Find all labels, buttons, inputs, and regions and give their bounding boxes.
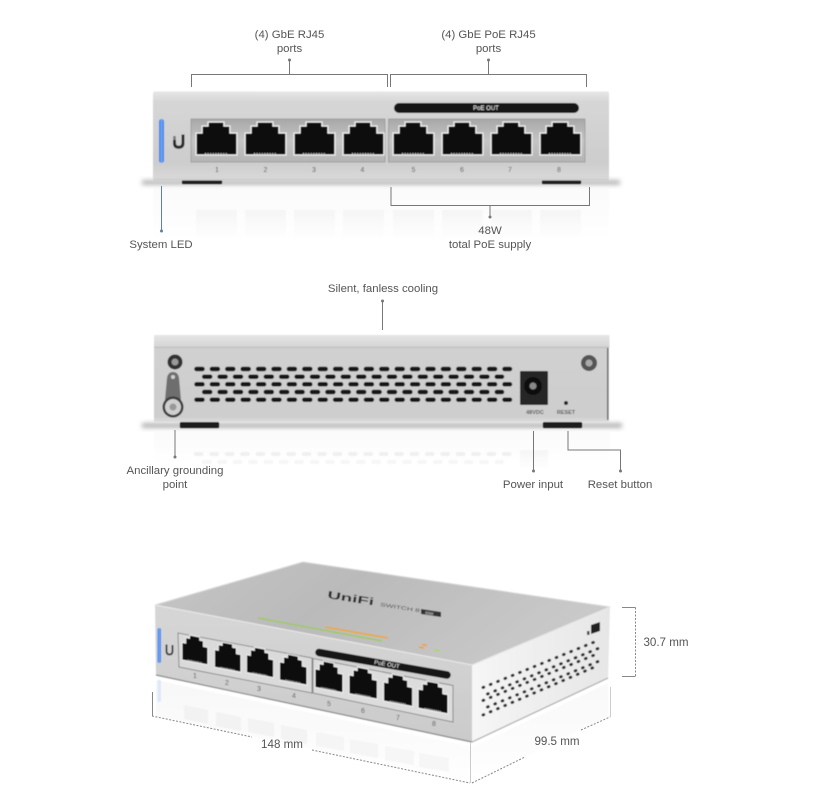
port numbers [215,167,561,174]
right bottom edge [472,678,608,742]
callout: Power input [503,431,564,491]
device: perspective view of switch [155,562,610,783]
port numbers: 4 [361,167,365,174]
port numbers: 8 [557,167,561,174]
system LED [159,119,164,163]
callout: System LED: System LED [129,239,193,251]
callout: System LED [129,186,193,251]
icon: U logo [166,644,172,654]
port numbers: 1 [215,167,219,174]
callout: Reset button [568,431,652,491]
PoE OUT bar: PoE OUT [374,660,400,670]
back plate [154,346,609,422]
port panel 5-8 [388,119,585,162]
reflection below back view [154,432,610,470]
dimension: 30.7 mm height [622,608,689,676]
callout: Ancillary grounding point: point [163,479,188,491]
port numbers [193,673,436,728]
callout: Silent, fanless cooling: Silent, fanless cooling [328,283,438,295]
reflection below front view [153,188,609,246]
callout: Ancillary grounding point [127,430,223,491]
callout: 48W total PoE supply: 48W [478,225,502,237]
ports 1 to 8 [182,634,448,714]
port numbers: 5 [412,167,416,174]
port panel 5-8 [313,658,453,722]
UniFi logo label on top: 60W [425,610,434,616]
right side vents [483,640,598,715]
callout: Ancillary grounding point: Ancillary grounding [127,465,223,477]
screw top right [581,355,597,371]
rubber feet back [180,422,582,428]
callout: GbE RJ45 ports: ports [277,43,302,55]
callout: 48W total PoE supply [391,187,590,251]
system LED [158,628,161,663]
top lip [154,335,610,348]
dimension: 148 mm width: 148 mm [261,738,303,751]
right face [472,607,610,742]
icon: grounding lug and screw [162,372,184,418]
label: 48VDC: 48VDC [526,410,544,416]
reset hole [564,401,568,405]
port numbers: 4 [292,693,296,700]
port numbers: 2 [225,680,229,687]
dimension: 148 mm width [152,692,470,783]
port numbers: 5 [327,701,331,708]
callout: GbE RJ45 ports: (4) GbE RJ45 [255,29,324,41]
dimension: 30.7 mm height: 30.7 mm [643,636,689,649]
top face [155,562,610,665]
callout: Reset button: Reset button [588,479,652,491]
ventilation holes [196,369,510,400]
PoE OUT bar [394,103,579,113]
shadow under back view [142,423,622,428]
callout: GbE PoE RJ45 ports: (4) GbE PoE RJ45 [441,29,536,41]
label: RESET: RESET [557,410,576,416]
UniFi logo label on top: SWITCH 8 [380,603,421,614]
callout: Silent, fanless cooling [328,283,438,330]
reflection below perspective view [156,680,608,783]
port numbers: 3 [257,686,261,693]
shadow under front view [142,180,620,185]
dimension: 99.5 mm depth [472,687,610,783]
callout: 48W total PoE supply: total PoE supply [449,239,531,251]
port numbers: 1 [193,673,197,680]
port numbers: 7 [508,167,512,174]
front bottom edge [156,675,472,742]
port panel 1-4 [191,119,385,162]
port numbers: 8 [432,721,436,728]
screw top left [168,354,182,370]
port numbers: 2 [264,167,268,174]
device: back view of switch [154,335,610,470]
dimension: 99.5 mm depth: 99.5 mm [534,735,580,748]
port panel 1-4 [178,633,312,693]
PoE OUT bar [319,652,447,675]
side power port [587,622,600,635]
front face [155,605,472,742]
UniFi logo label on top [327,588,441,617]
UniFi logo label on top: UniFi [327,588,375,608]
callout: GbE PoE RJ45 ports: ports [476,43,501,55]
icon: U logo [174,134,183,147]
status LEDs [258,618,440,651]
ports 1 to 8 [196,122,581,155]
device: front view of switch [153,92,609,246]
power jack [520,371,548,405]
port numbers: 7 [396,715,400,722]
switch body front [153,92,609,180]
port numbers: 6 [460,167,464,174]
top face front edge highlight [155,605,610,665]
port numbers: 3 [312,167,316,174]
callout: GbE PoE RJ45 ports [390,29,586,87]
PoE OUT bar: PoE OUT [473,106,499,112]
rubber feet front [182,179,581,184]
callout: Power input: Power input [503,479,564,491]
port numbers: 6 [361,708,365,715]
callout: GbE RJ45 ports [192,29,388,87]
